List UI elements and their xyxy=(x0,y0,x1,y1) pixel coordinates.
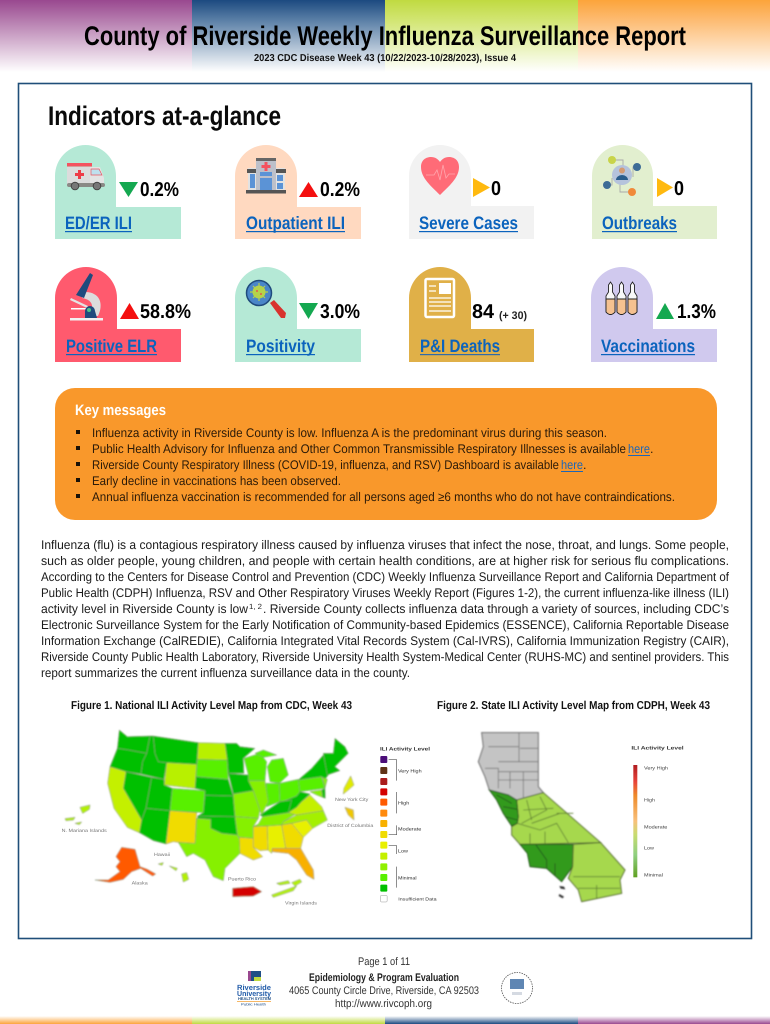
text block: introduction paragraph: Public Health (CDPH) Influenza, RSV and Other Respiratory Viruses Weekly Report (Figures 1-2), the current influenza-like illness (ILI) xyxy=(41,586,729,600)
bullet list: here xyxy=(628,442,650,456)
logo: Riverside University xyxy=(237,971,272,1006)
indicator: up green xyxy=(656,303,674,319)
label: Outbreaks xyxy=(602,213,677,233)
figure 1 caption: Figure 1. National ILI Activity Level Map from CDC, Week 43 xyxy=(71,700,352,712)
map labels: N. Mariana Islands xyxy=(62,828,107,833)
tile: Outbreaks xyxy=(592,145,717,239)
logo: Riverside University: Riverside xyxy=(237,983,271,992)
indicator: down green xyxy=(299,303,318,319)
tile: Positivity xyxy=(235,267,361,362)
value: 1.3% xyxy=(677,301,716,323)
icon: microscope xyxy=(70,273,103,320)
scale legend: Very High xyxy=(644,765,668,771)
icon: network xyxy=(603,156,641,196)
logo: Riverside University: University xyxy=(237,989,272,998)
bullet list: . xyxy=(650,442,653,456)
bullet list: Early decline in vaccinations has been observed. xyxy=(92,474,341,488)
heading: indicators: Indicators at-a-glance xyxy=(48,101,281,131)
scale legend: Moderate xyxy=(644,824,667,829)
text block: introduction paragraph xyxy=(41,538,729,680)
tile: Vaccinations xyxy=(591,267,717,362)
indicator: up red xyxy=(299,182,318,197)
logo: Riverside University: Public Health xyxy=(241,1002,266,1006)
text block: introduction paragraph: such as older people, young children, and people with certain health conditions, are at higher risk for serious flu complications. xyxy=(41,554,729,568)
value: 0.2% xyxy=(320,179,360,201)
text block: introduction paragraph: Influenza (flu) is a contagious respiratory illness caused by influenza viruses that infect the nose, throat, and lungs. Some people, xyxy=(41,538,729,552)
label: ED/ER ILI xyxy=(65,213,132,233)
text block: introduction paragraph: Electronic Surveillance System for the Early Notification of Community-based Epidemics (ESSENCE), California Reportable Disease xyxy=(41,618,729,632)
footer address: 4065 County Circle Drive, Riverside, CA 92503 xyxy=(289,985,479,997)
label: Outpatient ILI xyxy=(246,213,345,233)
scale legend: High xyxy=(644,797,655,803)
indicator: right amber xyxy=(473,178,490,197)
bullet list: here xyxy=(561,458,583,472)
tile: P&I Deaths xyxy=(409,267,534,362)
value: 0 xyxy=(491,178,501,200)
bottom colour band xyxy=(0,1016,770,1024)
map labels: Hawaii xyxy=(154,852,170,857)
map labels: Virgin Islands xyxy=(285,900,317,906)
map labels: Puerto Rico xyxy=(228,876,256,882)
map: national ILI activity xyxy=(62,730,437,906)
icon: hospital xyxy=(246,158,286,194)
tile: Severe Cases xyxy=(409,145,534,239)
scale legend xyxy=(631,745,684,878)
icon: magnifier with virus xyxy=(246,280,286,318)
text block: introduction paragraph: 1, 2 xyxy=(249,602,262,611)
value change: (+ 30) xyxy=(499,310,527,322)
map legend: Low xyxy=(398,848,408,853)
indicator: down green xyxy=(119,182,138,197)
text block: introduction paragraph: report summarizes the current influenza surveillance data in the county. xyxy=(41,666,410,680)
label: Severe Cases xyxy=(419,213,518,233)
counties xyxy=(478,733,625,902)
text block: introduction paragraph: . Riverside County collects influenza data through a variety of sources, including CDC’s xyxy=(263,602,729,616)
map: California ILI activity xyxy=(478,733,684,902)
label: P&I Deaths xyxy=(420,336,500,356)
text block: introduction paragraph: According to the Centers for Disease Control and Prevention (CDC) Weekly Influenza Surveillance Report and California Department of xyxy=(41,570,729,584)
icon: vials xyxy=(606,282,637,314)
panel: main frame xyxy=(18,84,752,938)
tile: Positive ELR xyxy=(55,267,191,362)
map legend: Moderate xyxy=(398,826,421,832)
tile: ED/ER ILI xyxy=(55,145,181,239)
map labels: District of Columbia xyxy=(327,823,373,828)
icon: heart xyxy=(421,157,459,195)
footer address: http://www.rivcoph.org xyxy=(335,998,432,1010)
map legend: High xyxy=(398,800,409,806)
logo: accreditation seal xyxy=(502,972,532,1004)
value: 58.8% xyxy=(140,301,191,323)
bullet list: Public Health Advisory for Influenza and Other Common Transmissible Respiratory Illnesses is available xyxy=(92,442,626,456)
map legend: Insufficient Data xyxy=(398,897,437,902)
value: 84 xyxy=(472,301,495,323)
text block: introduction paragraph: activity level in Riverside County is low xyxy=(41,602,249,616)
bullet list: . xyxy=(583,458,586,472)
map legend: Very High xyxy=(398,768,422,773)
tile: Outpatient ILI xyxy=(235,145,361,239)
footer address xyxy=(289,972,479,1010)
value: 3.0% xyxy=(320,301,360,323)
subtitle: 2023 CDC Disease Week 43 (10/22/2023-10/28/2023), Issue 4 xyxy=(254,53,516,64)
header colour band xyxy=(0,0,770,72)
map labels: Alaska xyxy=(132,880,148,886)
indicator: up red xyxy=(120,303,139,319)
icon: ambulance xyxy=(67,163,105,190)
label: Positivity xyxy=(246,336,315,356)
icon: document xyxy=(426,279,454,317)
footer address: Epidemiology & Program Evaluation xyxy=(309,972,459,984)
map legend: Minimal xyxy=(398,875,417,880)
bullet list: Influenza activity in Riverside County is low. Influenza A is the predominant virus during this season. xyxy=(92,426,607,440)
indicator: right amber xyxy=(657,178,673,197)
bullet list xyxy=(76,426,675,504)
map labels xyxy=(62,797,373,906)
value: 0 xyxy=(674,178,684,200)
bullet list: Riverside County Respiratory Illness (COVID-19, influenza, and RSV) Dashboard is available xyxy=(92,458,559,472)
text block: introduction paragraph: Information Exchange (CalREDIE), California Integrated Vital Records System (Cal-IVRS), California Immunization Registry (CAIR), xyxy=(41,634,729,648)
map legend xyxy=(380,746,437,902)
map labels: New York City xyxy=(335,797,368,802)
map legend: ILI Activity Level xyxy=(380,746,430,752)
bullet list: Annual influenza vaccination is recommended for all persons aged ≥6 months who do not have contraindications. xyxy=(92,490,675,504)
logo: Riverside University: HEALTH SYSTEM xyxy=(238,996,272,1001)
figure 2 caption: Figure 2. State ILI Activity Level Map from CDPH, Week 43 xyxy=(437,700,710,712)
scale legend: Low xyxy=(644,845,654,851)
scale legend: ILI Activity Level xyxy=(631,745,684,751)
label: Positive ELR xyxy=(66,336,157,356)
label: Vaccinations xyxy=(601,336,695,356)
value: 0.2% xyxy=(140,179,179,201)
key messages heading: Key messages xyxy=(75,402,166,419)
panel: key messages xyxy=(55,388,717,520)
footer page number: Page 1 of 11 xyxy=(358,956,410,968)
states xyxy=(65,730,354,897)
scale legend: Minimal xyxy=(644,872,663,878)
